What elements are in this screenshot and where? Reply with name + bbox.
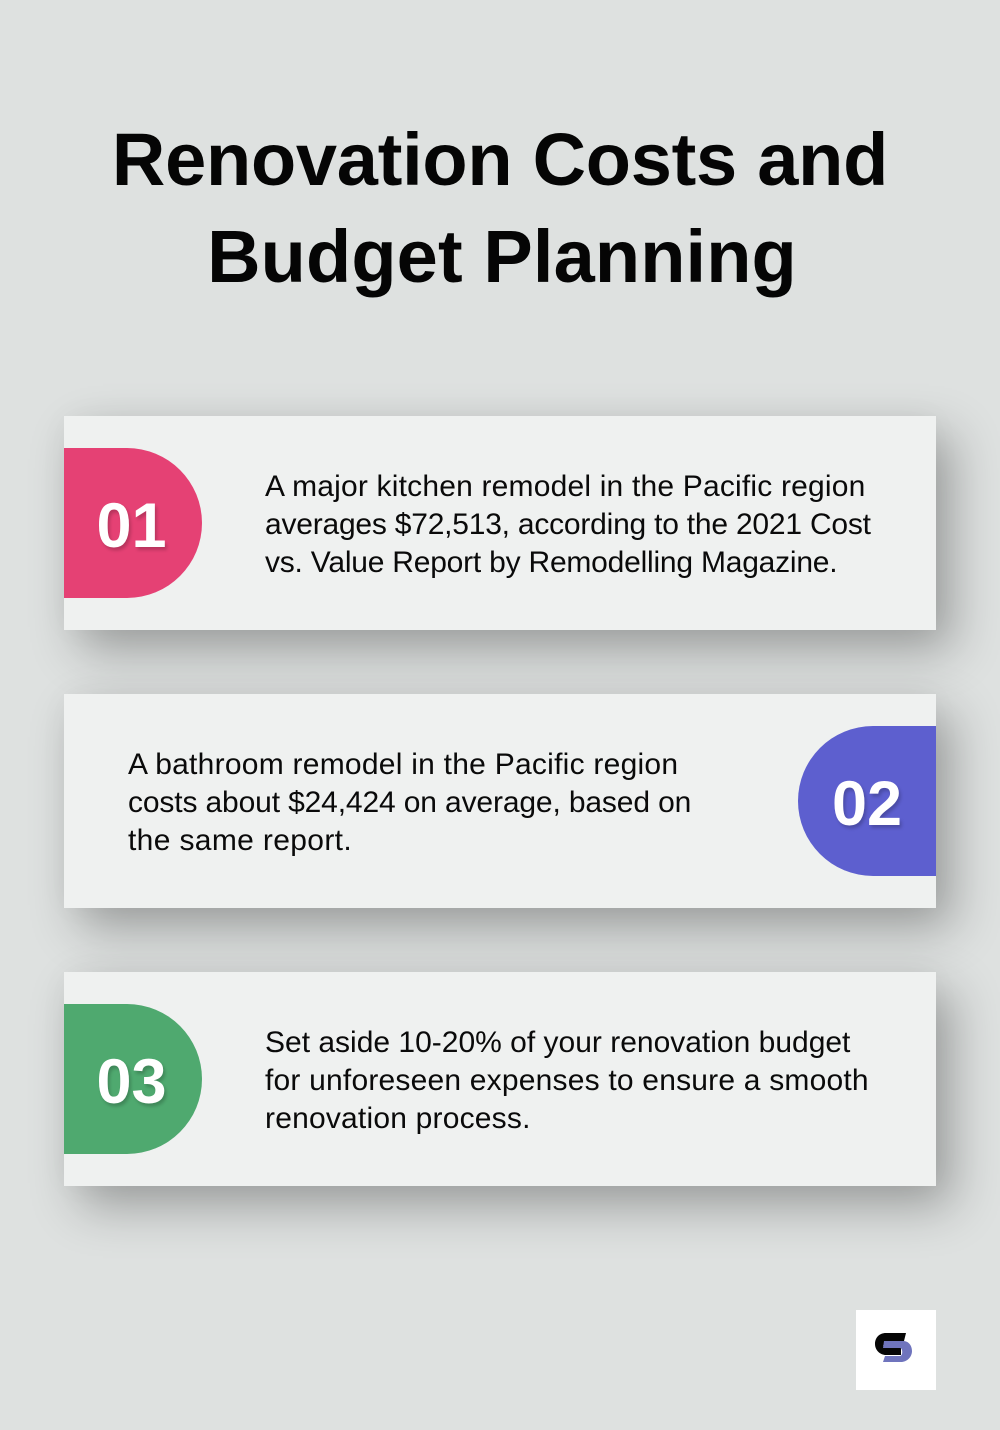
text: bathroom remodel: the same report.: [128, 824, 352, 857]
badge: 02: [798, 726, 936, 876]
panel: kitchen remodel cost: [64, 416, 936, 630]
logo: [856, 1310, 936, 1390]
title: Renovation Costs and: [112, 118, 888, 201]
panel: contingency budget: [64, 972, 936, 1186]
text: kitchen remodel: A major kitchen remodel in the Pacific region: [265, 470, 866, 503]
badge: 02: 02: [832, 769, 902, 839]
text: contingency advice: renovation process.: [265, 1102, 531, 1135]
text: contingency advice: for unforeseen expenses to ensure a smooth: [265, 1064, 869, 1097]
badge: 03: [64, 1004, 202, 1154]
title: [112, 118, 888, 298]
text: kitchen remodel: [265, 470, 871, 579]
text: contingency advice: [265, 1026, 869, 1135]
title: Budget Planning: [207, 215, 797, 298]
text: kitchen remodel: vs. Value Report by Remodelling Magazine.: [265, 546, 837, 579]
badge: 03: 03: [96, 1047, 167, 1117]
text: contingency advice: Set aside 10-20% of your renovation budget: [265, 1026, 850, 1059]
text: bathroom remodel: A bathroom remodel in the Pacific region: [128, 748, 678, 781]
text: bathroom remodel: [128, 748, 691, 857]
icon: S logo mark: [875, 1333, 912, 1362]
text: bathroom remodel: costs about $24,424 on average, based on: [128, 786, 691, 819]
panel: bathroom remodel cost: [64, 694, 936, 908]
badge: 01: 01: [96, 491, 167, 561]
text: kitchen remodel: averages $72,513, according to the 2021 Cost: [265, 508, 871, 541]
badge: 01: [64, 448, 202, 598]
